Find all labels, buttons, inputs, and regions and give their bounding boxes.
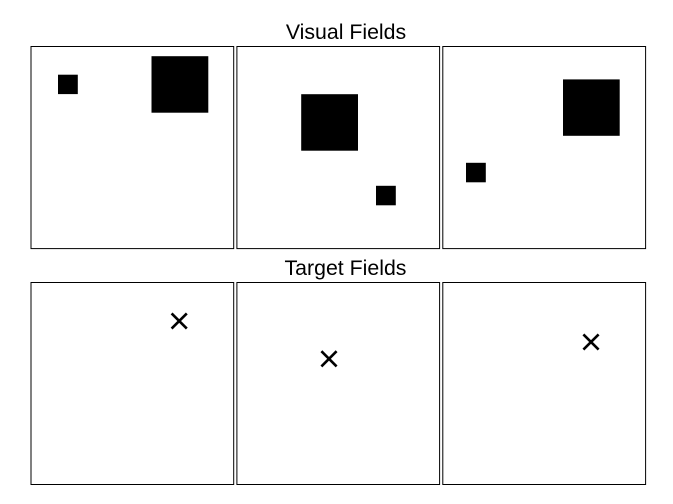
- panel: target field 3: [443, 282, 646, 484]
- heading: Target Fields: Target Fields: [285, 256, 406, 280]
- icon: target cross 3: [583, 334, 599, 350]
- panel: visual field 2: [237, 46, 440, 249]
- panel: target field 2: [237, 282, 440, 484]
- panel: visual field 3: [443, 46, 646, 249]
- panel: target field 1: [31, 282, 234, 484]
- icon: target cross 2: [321, 351, 337, 366]
- heading: Visual Fields: Visual Fields: [286, 20, 406, 44]
- icon: target cross 1: [172, 313, 187, 329]
- panel: visual field 1: [31, 46, 234, 249]
